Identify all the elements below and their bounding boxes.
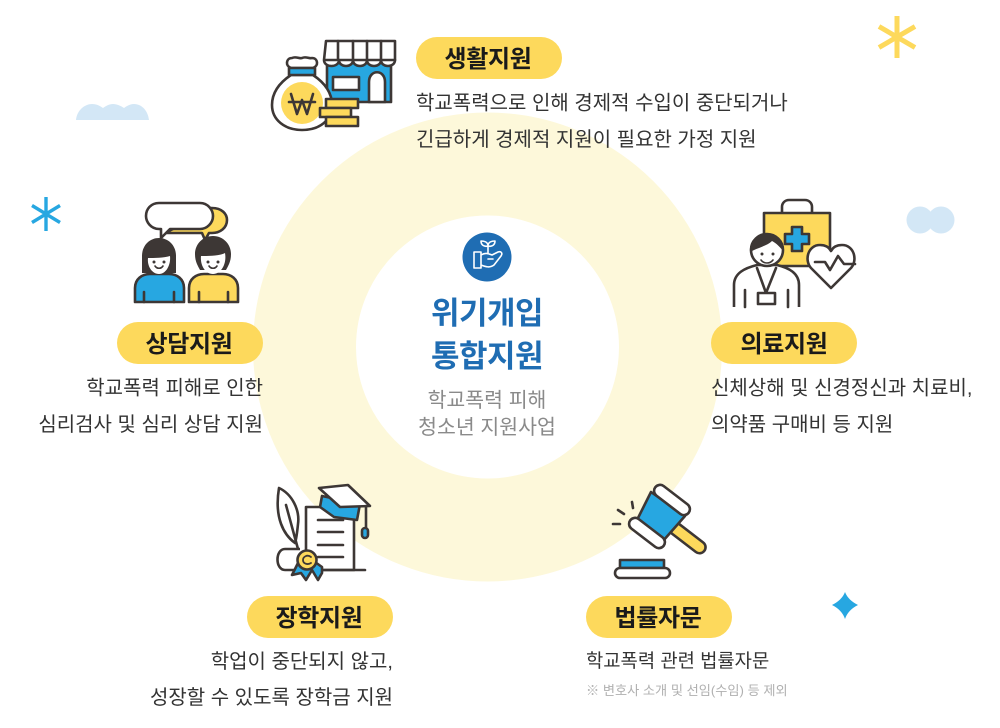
panel: 생활지원 — [272, 37, 788, 151]
pill heading — [711, 322, 857, 364]
description — [416, 92, 788, 151]
description: 긴급하게 경제적 지원이 필요한 가정 지원 — [416, 128, 757, 151]
description — [586, 650, 788, 698]
decoration: blue sparkle — [832, 592, 858, 619]
description: 학교폭력 관련 법률자문 — [586, 650, 769, 671]
pill heading: 의료지원 — [740, 331, 828, 358]
centre panel — [418, 232, 556, 439]
centre title — [431, 296, 543, 374]
pill heading — [416, 37, 562, 79]
description: 학업이 중단되지 않고, — [211, 650, 393, 673]
icon: scholarship certificate, quill and cap — [278, 485, 370, 580]
description: 학교폭력 피해로 인한 — [86, 376, 263, 400]
centre subtitle — [418, 389, 556, 439]
icon: two people talking — [135, 203, 238, 302]
central ring — [304, 164, 670, 530]
pill heading: 법률자문 — [614, 605, 702, 632]
panel: 상담지원 — [38, 203, 263, 436]
description — [38, 376, 263, 436]
icon: gavel — [613, 482, 708, 578]
description — [711, 376, 972, 436]
description: 신체상해 및 신경정신과 치료비, — [711, 376, 972, 400]
centre title: 위기개입 — [431, 296, 543, 331]
panel: 법률자문 — [586, 482, 788, 698]
pill heading — [117, 322, 263, 364]
decoration: left cloud — [76, 104, 149, 120]
decoration: right cloud — [906, 206, 954, 234]
panel: 의료지원 — [711, 200, 972, 436]
pill heading: 상담지원 — [145, 331, 233, 358]
pill heading — [247, 596, 393, 638]
description — [150, 650, 393, 709]
icon: doctor, medical bag and heart — [734, 200, 855, 307]
description: 심리검사 및 심리 상담 지원 — [38, 413, 263, 436]
icon: hand holding sprout — [462, 232, 512, 282]
decoration: blue asterisk — [32, 197, 60, 231]
centre title: 통합지원 — [431, 339, 543, 374]
centre subtitle: 청소년 지원사업 — [418, 416, 556, 439]
decoration: yellow asterisk — [879, 16, 915, 58]
icon: money bag and shop — [272, 41, 395, 130]
pill heading — [586, 596, 732, 638]
pill heading: 생활지원 — [444, 46, 532, 73]
panel: 장학지원 — [150, 485, 393, 709]
description: 의약품 구매비 등 지원 — [711, 413, 893, 436]
description: 학교폭력으로 인해 경제적 수입이 중단되거나 — [416, 92, 788, 114]
centre subtitle: 학교폭력 피해 — [428, 389, 546, 412]
description: 성장할 수 있도록 장학금 지원 — [150, 686, 393, 709]
pill heading: 장학지원 — [275, 605, 363, 632]
description: ※ 변호사 소개 및 선임(수임) 등 제외 — [586, 683, 788, 698]
